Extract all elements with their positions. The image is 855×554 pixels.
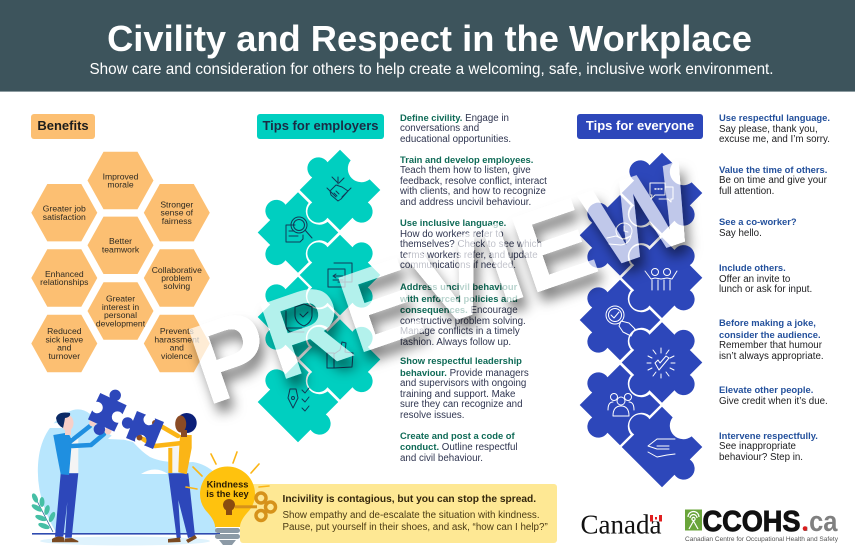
hexagon: Enhanced relationships: Enhanced xyxy=(45,269,84,279)
icon: handshake xyxy=(327,177,351,201)
hexagon: Prevents harassment and violence: violence xyxy=(161,351,193,361)
tip: Train and develop employees: with clients, and how to recognize xyxy=(400,186,546,197)
icon: clock in hand xyxy=(607,223,632,245)
hexagon: Collaborative problem solving: Collaborative xyxy=(152,265,202,275)
bulb text: is the key xyxy=(206,489,250,499)
tip: Create and post a code of conduct: and civil behaviour. xyxy=(400,452,483,464)
logo: CCOHS xyxy=(685,506,839,543)
heading: Tips for everyone xyxy=(577,114,703,138)
hexagon: Collaborative problem solving xyxy=(144,249,210,307)
icon: helping hands xyxy=(648,439,675,457)
icon: check with burst xyxy=(647,348,675,378)
background blob xyxy=(38,409,216,534)
tip: Train and develop employees: Train and develop employees. xyxy=(400,154,533,164)
logo: CCOHS: Canadian Centre for Occupational Health and Safety xyxy=(685,536,839,543)
tip: Address uncivil behaviour: Address uncivil behaviour xyxy=(400,281,517,292)
tip: Elevate other people: Elevate other people. xyxy=(719,384,813,395)
tip: Use inclusive language: themselves? Check to see which xyxy=(400,239,542,250)
icon: check button and hand xyxy=(606,306,635,336)
hexagon: Better teamwork xyxy=(88,217,154,274)
hexagon: Prevents harassment and violence xyxy=(144,315,210,372)
tip: Elevate other people xyxy=(719,384,828,406)
hexagon: Better teamwork: Better xyxy=(109,236,132,246)
hexagon: Stronger sense of fairness: Stronger xyxy=(160,199,193,209)
tip: Value the time of others: full attention. xyxy=(719,186,774,196)
tip: See a co-worker: See a co-worker? xyxy=(719,216,797,227)
hexagon: Prevents harassment and violence: harassment xyxy=(154,334,200,344)
tip: Use inclusive language: terms workers refer, and update xyxy=(400,250,538,260)
icon: thumbs up xyxy=(327,342,353,368)
logo: CCOHS: .ca xyxy=(802,506,839,538)
heading: Tips for employers xyxy=(257,114,384,138)
callout panel: incivility xyxy=(240,484,557,542)
hexagon: Greater interest in personal development: personal xyxy=(104,310,137,320)
tip: Address uncivil behaviour: Manage conflicts in a timely xyxy=(400,326,520,337)
callout heading: Incivility is contagious, but you can stop the spread. xyxy=(282,494,536,504)
hexagon: Improved morale: Improved xyxy=(103,171,139,181)
hexagon: Reduced sick leave and turnover: turnover xyxy=(49,351,80,361)
tip: Use respectful language: Use respectful language. xyxy=(719,112,830,123)
hexagon: Collaborative problem solving: problem xyxy=(161,273,192,283)
icon: lightbulb xyxy=(186,452,269,545)
hexagon: Greater job satisfaction: satisfaction xyxy=(43,212,86,222)
tip: Before making a joke: isn’t always appropriate. xyxy=(719,350,824,362)
tip: See a co-worker xyxy=(719,216,797,238)
tip: See a co-worker: Say hello. xyxy=(719,228,762,238)
hexagon: Improved morale: morale xyxy=(107,180,134,190)
hexagon: Improved morale xyxy=(88,152,154,209)
tip: Include others: lunch or ask for input. xyxy=(719,284,812,295)
tip: Use respectful language: Say please, thank you, xyxy=(719,124,818,134)
icon: documents exchange xyxy=(328,263,352,287)
heading: Benefits xyxy=(31,114,95,138)
tip: Train and develop employees: and address uncivil behaviour. xyxy=(400,196,531,208)
puzzle pieces held xyxy=(84,384,164,449)
tip: Show respectful leadership behaviour: sure they can recognize and xyxy=(400,399,522,410)
callout text: Pause, put yourself in their shoes, and ask, “how can I help?” xyxy=(282,522,548,532)
tip: Address uncivil behaviour: with enforced policies and xyxy=(400,292,518,304)
plant xyxy=(31,492,57,532)
tip: Use respectful language xyxy=(719,112,830,145)
puzzle pieces blue xyxy=(561,143,721,497)
title: Civility and Respect in the Workplace xyxy=(107,18,752,59)
heading: Benefits: Benefits xyxy=(37,118,89,133)
tip: Address uncivil behaviour: constructive problem solving. xyxy=(400,316,526,326)
tip: Use respectful language: excuse me, and I’m sorry. xyxy=(719,134,830,145)
logo: Canada wordmark: Canada xyxy=(580,510,661,540)
tip: Address uncivil behaviour: consequences. Encourage xyxy=(400,304,518,316)
hexagon: Greater job satisfaction: Greater job xyxy=(43,204,86,214)
hexagon: Enhanced relationships xyxy=(31,249,97,307)
tip: Include others: Include others. xyxy=(719,262,786,273)
hexagon: Greater job satisfaction xyxy=(31,184,97,241)
icon: key xyxy=(223,493,276,520)
hexagon: Reduced sick leave and turnover: and xyxy=(57,343,72,353)
watermark: PREVIEW: PREVIEW xyxy=(174,138,713,430)
tip: Show respectful leadership behaviour: Show respectful leadership xyxy=(400,355,522,366)
hexagon: Stronger sense of fairness xyxy=(144,184,210,241)
hexagon: Reduced sick leave and turnover xyxy=(31,315,97,372)
tip: Address uncivil behaviour xyxy=(400,281,526,348)
tip: Intervene respectfully: behaviour? Step in. xyxy=(719,452,803,462)
tip: Create and post a code of conduct: conduct. Outline respectful xyxy=(400,441,518,453)
ground xyxy=(32,533,220,546)
hexagon: Reduced sick leave and turnover: sick leave xyxy=(45,334,83,344)
bulb text: Kindness xyxy=(207,480,248,490)
tip: Define civility: conversations and xyxy=(400,123,479,134)
tip: Train and develop employees: Teach them how to listen, give xyxy=(400,165,531,176)
subtitle: Show care and consideration for others to help create a welcoming, safe, inclusive work environment. xyxy=(89,61,774,78)
icon: shield on document xyxy=(286,304,312,332)
tip: Create and post a code of conduct: Create and post a code of xyxy=(400,430,515,440)
hexagon: Stronger sense of fairness: fairness xyxy=(162,216,192,226)
clouds xyxy=(47,423,168,474)
tip: Define civility: Define civility. Engage in xyxy=(400,112,509,124)
hexagon: Prevents harassment and violence: and xyxy=(170,343,184,353)
text block: employer tips xyxy=(400,112,547,464)
tip: Use inclusive language: communications if needed. xyxy=(400,260,516,271)
puzzle pieces teal xyxy=(239,140,399,452)
hexagon: Greater interest in personal development: interest in xyxy=(102,302,139,312)
tip: Create and post a code of conduct xyxy=(400,430,518,464)
icon: document with magnifier xyxy=(286,217,312,242)
tip: Train and develop employees xyxy=(400,154,547,208)
icon: two people xyxy=(645,268,677,290)
tip: Use inclusive language: How do workers refer to xyxy=(400,228,504,240)
tip: Before making a joke: consider the audience. xyxy=(719,328,821,340)
heading: Tips for everyone: Tips for everyone xyxy=(586,118,694,133)
man xyxy=(52,413,112,542)
tip: Before making a joke xyxy=(719,317,824,362)
tip: Train and develop employees: feedback, resolve conflict, interact xyxy=(400,176,547,186)
hexagon: Collaborative problem solving: solving xyxy=(163,281,190,291)
tip: Use inclusive language xyxy=(400,217,542,271)
tip: Show respectful leadership behaviour xyxy=(400,355,529,420)
hexagon: Prevents harassment and violence: Prevents xyxy=(160,326,194,336)
tip: Intervene respectfully xyxy=(719,430,818,462)
hexagon: Greater interest in personal development: development xyxy=(96,318,146,328)
tip: Value the time of others xyxy=(719,164,827,196)
text block: everyone tips xyxy=(719,112,830,462)
header banner xyxy=(0,0,855,92)
hexagon: Better teamwork: teamwork xyxy=(102,244,140,254)
tip: Define civility xyxy=(400,112,511,144)
tip: Address uncivil behaviour: fashion. Always follow up. xyxy=(400,336,511,348)
icons blue pieces xyxy=(606,183,677,457)
heading: Tips for employers: Tips for employers xyxy=(262,118,379,133)
tip: Elevate other people: Give credit when it’s due. xyxy=(719,396,828,406)
icon: group of people xyxy=(608,394,634,416)
icon: pen and checklist xyxy=(288,388,309,411)
callout text: Show empathy and de-escalate the situation with kindness. xyxy=(282,510,540,521)
tip: Before making a joke: Remember that humour xyxy=(719,340,822,351)
hexagon: Greater interest in personal development xyxy=(88,282,154,340)
hexagon: Stronger sense of fairness: sense of xyxy=(161,208,194,218)
hexagon: Reduced sick leave and turnover: Reduced xyxy=(47,326,82,336)
callout text xyxy=(282,510,548,532)
tip: Intervene respectfully: Intervene respectfully. xyxy=(719,430,818,440)
logo: CCOHS: CCOHS xyxy=(702,506,800,538)
tip: Include others xyxy=(719,262,812,295)
icon: chat bubbles xyxy=(650,183,673,202)
tip: Define civility: educational opportunities. xyxy=(400,134,511,144)
hexagon: Enhanced relationships: relationships xyxy=(40,277,88,287)
woman xyxy=(136,413,197,543)
tip: Value the time of others: Be on time and give your xyxy=(719,175,827,186)
tip: Use inclusive language: Use inclusive language. xyxy=(400,217,506,228)
icons teal pieces xyxy=(286,177,353,411)
tip: Show respectful leadership behaviour: training and support. Make xyxy=(400,388,515,400)
tip: Show respectful leadership behaviour: resolve issues. xyxy=(400,410,464,420)
tip: Value the time of others: Value the time of others. xyxy=(719,164,827,174)
tip: Show respectful leadership behaviour: behaviour. Provide managers xyxy=(400,366,529,378)
tip: Include others: Offer an invite to xyxy=(719,274,790,284)
hexagon: Greater interest in personal development: Greater xyxy=(106,294,135,304)
tip: Intervene respectfully: See inappropriate xyxy=(719,441,796,452)
tip: Before making a joke: Before making a joke, xyxy=(719,317,816,328)
tip: Show respectful leadership behaviour: and supervisors with ongoing xyxy=(400,378,526,389)
